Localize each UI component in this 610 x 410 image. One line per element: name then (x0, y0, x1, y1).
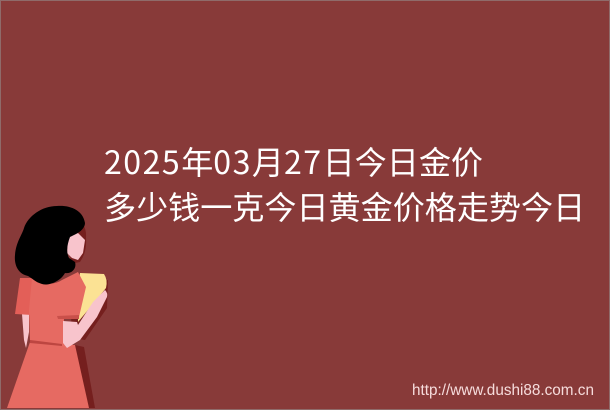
title: 多少钱一克今日黄金价格走势今日 (104, 183, 585, 229)
sleeve fold (57, 315, 79, 319)
dress bodice (29, 272, 86, 345)
shadow behind figure (70, 220, 108, 408)
far arm (22, 314, 29, 348)
waistband (30, 340, 62, 346)
sleeve left (15, 278, 32, 315)
hand and forearm (63, 290, 107, 348)
book (78, 273, 107, 322)
hair (15, 206, 85, 285)
illustration: woman holding a book (7, 206, 108, 408)
title (104, 138, 585, 229)
watermark url: http://www.dushi88.com.cn (412, 382, 594, 399)
face (67, 233, 85, 260)
dress skirt (7, 342, 89, 408)
title: 2025年03月27日今日金价 (104, 138, 483, 184)
